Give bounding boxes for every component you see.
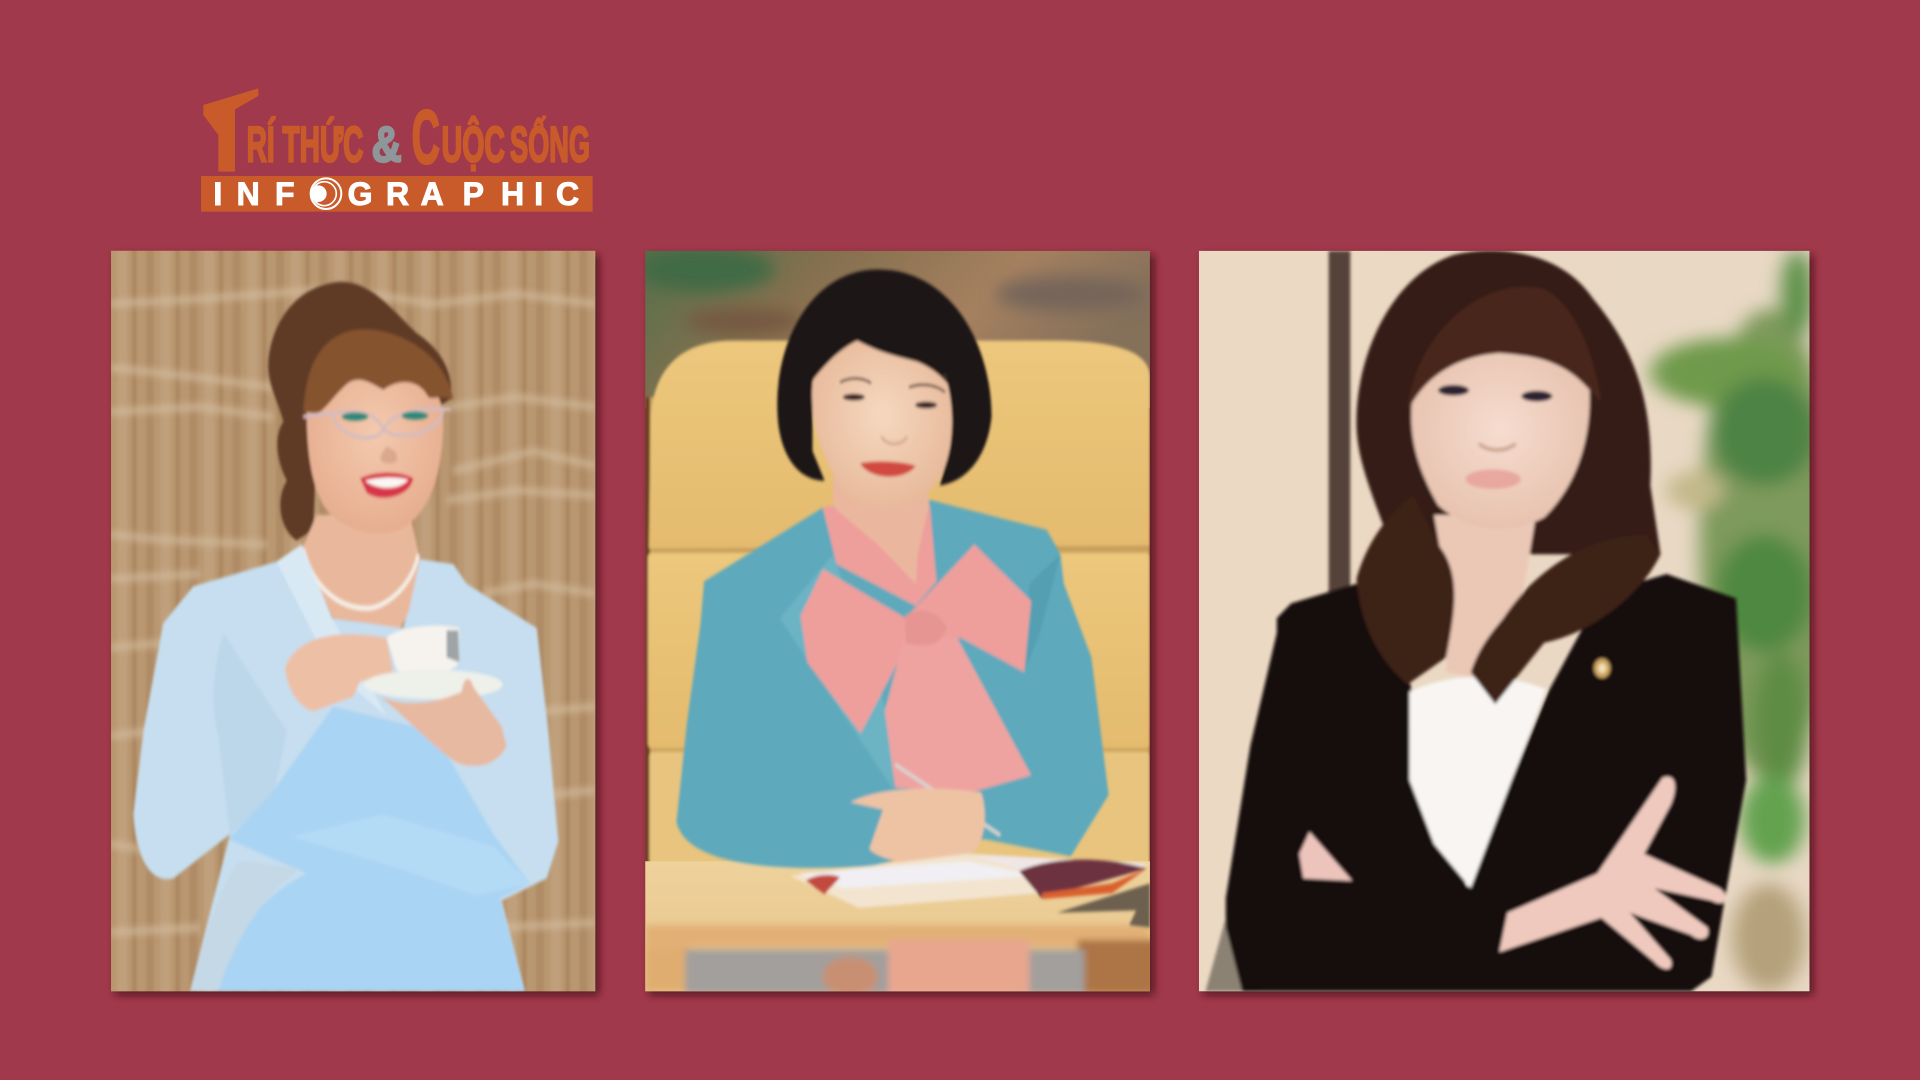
hair fringe [812,336,950,384]
jacket [133,544,558,991]
glasses [303,409,451,438]
eyes [342,412,368,421]
desk object [1057,883,1150,928]
face [812,340,952,508]
blazer [1226,574,1746,991]
logo wordmark: C [412,95,440,180]
saucer [364,670,503,699]
face [1411,348,1590,529]
infographic banner [201,176,593,212]
neck [1434,515,1536,682]
mouth [860,461,916,477]
eyes [1438,385,1552,402]
desk [645,861,1150,991]
dress wrap [218,707,530,991]
cup [387,626,459,675]
desk reflection [645,925,1157,996]
panel shadows [115,255,1813,995]
room background [1199,251,1809,991]
pen [895,764,1000,835]
front hair [1356,495,1454,684]
nose [1479,444,1516,450]
mouth [360,473,413,498]
banner icon: concentric circle [310,178,341,209]
logo wordmark [247,95,590,180]
lapel pin [1594,658,1610,678]
jacket [676,500,1109,868]
white top [1409,677,1546,888]
hand [850,788,985,869]
logo: Tri Thức & Cuộc Sống Infographic [201,88,593,212]
left hand fingers [1299,832,1352,881]
panel: portrait centre [637,247,1157,996]
banner text [213,176,579,212]
nose [380,446,397,464]
bangs [303,329,453,413]
mouth [1465,469,1521,489]
back hair [1356,251,1661,554]
wall background [100,240,610,1010]
plant foliage [1650,250,1838,991]
subject: woman in teal jacket [676,269,1150,928]
face [304,377,444,532]
hair [777,269,992,486]
left hand [285,634,393,711]
right arm hand [1499,777,1726,969]
nose [881,436,907,444]
painting background [645,251,1150,408]
collar [277,544,387,716]
logo mark: large T [203,88,258,172]
bow [800,544,1031,734]
neck and chest [302,515,420,628]
scarf [823,503,936,606]
right hand [380,679,507,766]
banner text: INF [213,176,295,212]
logo wordmark: RÍ THỨC [247,117,363,173]
logo wordmark: UỘC [442,116,505,173]
eyes [843,394,937,408]
chair edge [1205,918,1258,991]
subject: woman in light blue [133,282,558,991]
panel: portrait left [100,240,610,1010]
hair [268,282,451,541]
panel: portrait right [1199,250,1838,991]
eyebrows [840,378,945,392]
neck [832,475,931,584]
sleeve shading [214,633,287,834]
chair [645,341,1150,869]
dark column [1329,251,1350,595]
necklace [303,549,418,608]
fringe [1407,287,1601,412]
notebook [790,854,1041,908]
subject: woman in black blazer [1205,251,1746,991]
logo wordmark: SỐNG [510,116,590,173]
banner text: GRAPHIC [348,176,579,212]
logo wordmark: & [372,117,402,173]
